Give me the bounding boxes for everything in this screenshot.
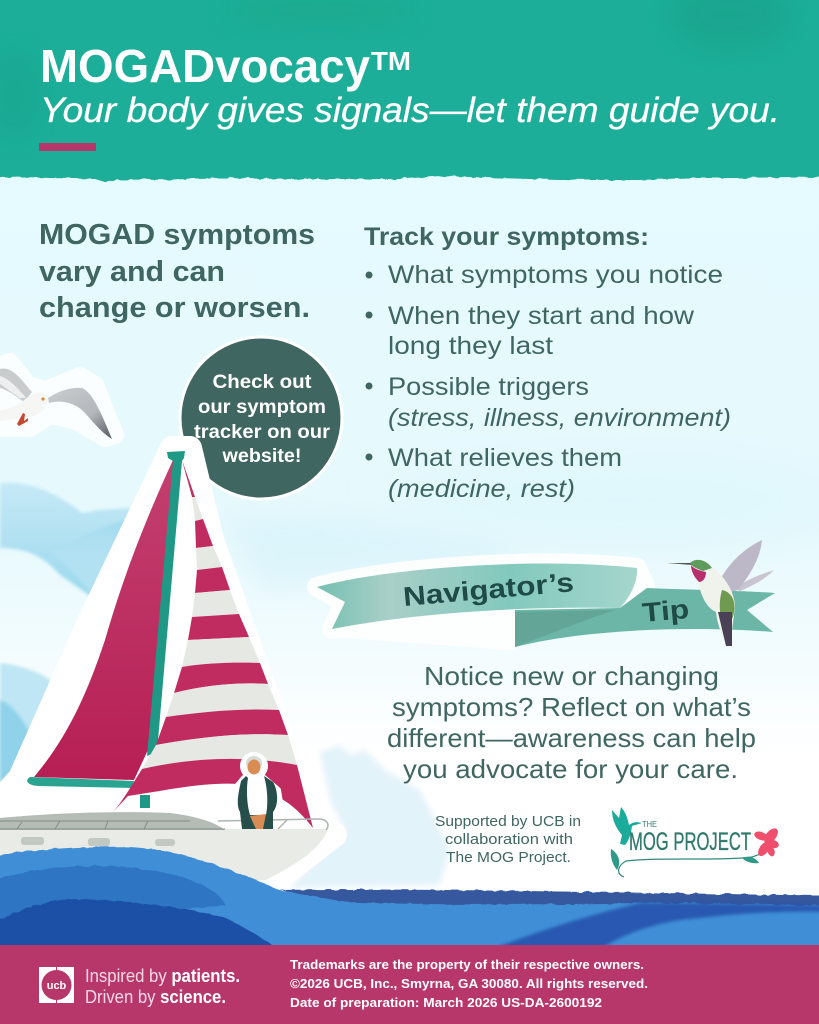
ocean waves [0, 847, 819, 960]
watercolor hills [0, 460, 819, 888]
list item: when they start [366, 302, 695, 360]
icon: seagull [0, 362, 115, 439]
left heading: MOGAD symptoms vary: MOGAD symptoms [39, 219, 315, 251]
hull [0, 829, 328, 880]
left heading: MOGAD symptoms vary: change or worsen. [39, 292, 310, 324]
legal text [290, 957, 648, 1010]
front ribbon [317, 564, 637, 629]
tagline: Driven by science. [85, 987, 226, 1007]
title: MOGADvocacy [40, 40, 370, 92]
ucb logo [39, 967, 74, 1003]
ucb logo: ucb [47, 980, 67, 992]
track your symptoms list [364, 223, 731, 503]
left sail [34, 460, 175, 780]
hummingbird body [692, 560, 735, 640]
icon: hummingbird [667, 540, 774, 646]
legal text: Date of preparation: March 2026 US-DA-2600192 [290, 995, 602, 1010]
back ribbon [515, 588, 775, 647]
supported by text: collaboration with [445, 832, 573, 848]
list item: when they start: long they last [388, 332, 553, 360]
logo wordmark: THE [642, 820, 657, 829]
accent bar [39, 143, 96, 151]
mast base [140, 795, 150, 808]
callout: symptom tracker badge [180, 337, 342, 499]
list item: triggers [366, 373, 731, 432]
logo: The MOG Project: MOG PROJECT [629, 828, 751, 856]
tagline: Inspired by patients. [85, 966, 240, 986]
ribbon text: Tip: Tip [641, 594, 690, 628]
mast [147, 451, 185, 756]
cabin [0, 812, 225, 830]
ribbon text: Navigator's: Navigator’s [402, 567, 575, 612]
callout: symptom tracker badge: tracker on our [194, 422, 331, 443]
striped right sail [113, 460, 313, 828]
logo vine and leaves [619, 846, 772, 877]
left heading: MOGAD symptoms vary: vary and can [39, 256, 225, 288]
left heading: MOGAD symptoms vary [39, 219, 315, 324]
hummingbird front wing [721, 540, 762, 592]
navigator's tip text: symptoms? Reflect on what’s [392, 692, 751, 722]
list item: relieves: (medicine, rest) [388, 475, 575, 503]
navigator's tip text: Notice new or changing [424, 661, 719, 691]
portholes [21, 837, 175, 846]
subtitle: Your body gives signals—let them guide you. [40, 91, 780, 130]
navigator's tip text [387, 661, 756, 784]
railing [218, 819, 328, 830]
ribbon halo [317, 564, 645, 640]
navigator's tip text: you advocate for your care. [403, 754, 738, 784]
trademark: TM [371, 46, 411, 76]
header band [0, 0, 819, 182]
navigator's tip ribbon banner [317, 564, 775, 647]
navigator's tip text: different—awareness can help [387, 723, 756, 753]
hummingbird rear wing [738, 570, 774, 592]
logo: The MOG Project [611, 807, 781, 877]
logo flower [753, 826, 781, 858]
gull right wing [48, 388, 112, 439]
callout: symptom tracker badge: our symptom [198, 397, 326, 418]
gull legs [17, 413, 28, 426]
list item: when they start: When they start and how [388, 302, 695, 330]
logo bird [612, 807, 642, 845]
list heading: Track your symptoms: [364, 223, 649, 251]
list item: relieves [366, 444, 622, 503]
gull body [0, 393, 48, 421]
callout: symptom tracker badge: website! [221, 446, 302, 467]
supported by text: The MOG Project. [446, 850, 571, 866]
legal text: Trademarks are the property of their respective owners. [290, 957, 644, 972]
sailor figure [232, 752, 282, 829]
legal text: ©2026 UCB, Inc., Smyrna, GA 30080. All rights reserved. [290, 976, 648, 991]
list item: what symptoms: What symptoms you notice [388, 261, 723, 289]
list item: triggers: Possible triggers [388, 373, 589, 401]
illustration: sailboat [0, 448, 335, 885]
supported by text [435, 814, 581, 866]
list item: relieves: What relieves them [388, 444, 622, 472]
gull left wing [0, 369, 32, 402]
page background [0, 170, 819, 950]
tagline [85, 966, 240, 1007]
callout: symptom tracker badge: Check out [212, 372, 312, 393]
white sticker halo [0, 448, 335, 885]
list item: triggers: (stress, illness, environment) [388, 404, 731, 432]
boom [27, 777, 134, 788]
footer band [0, 945, 819, 1024]
supported by text: Supported by UCB in [435, 814, 581, 830]
